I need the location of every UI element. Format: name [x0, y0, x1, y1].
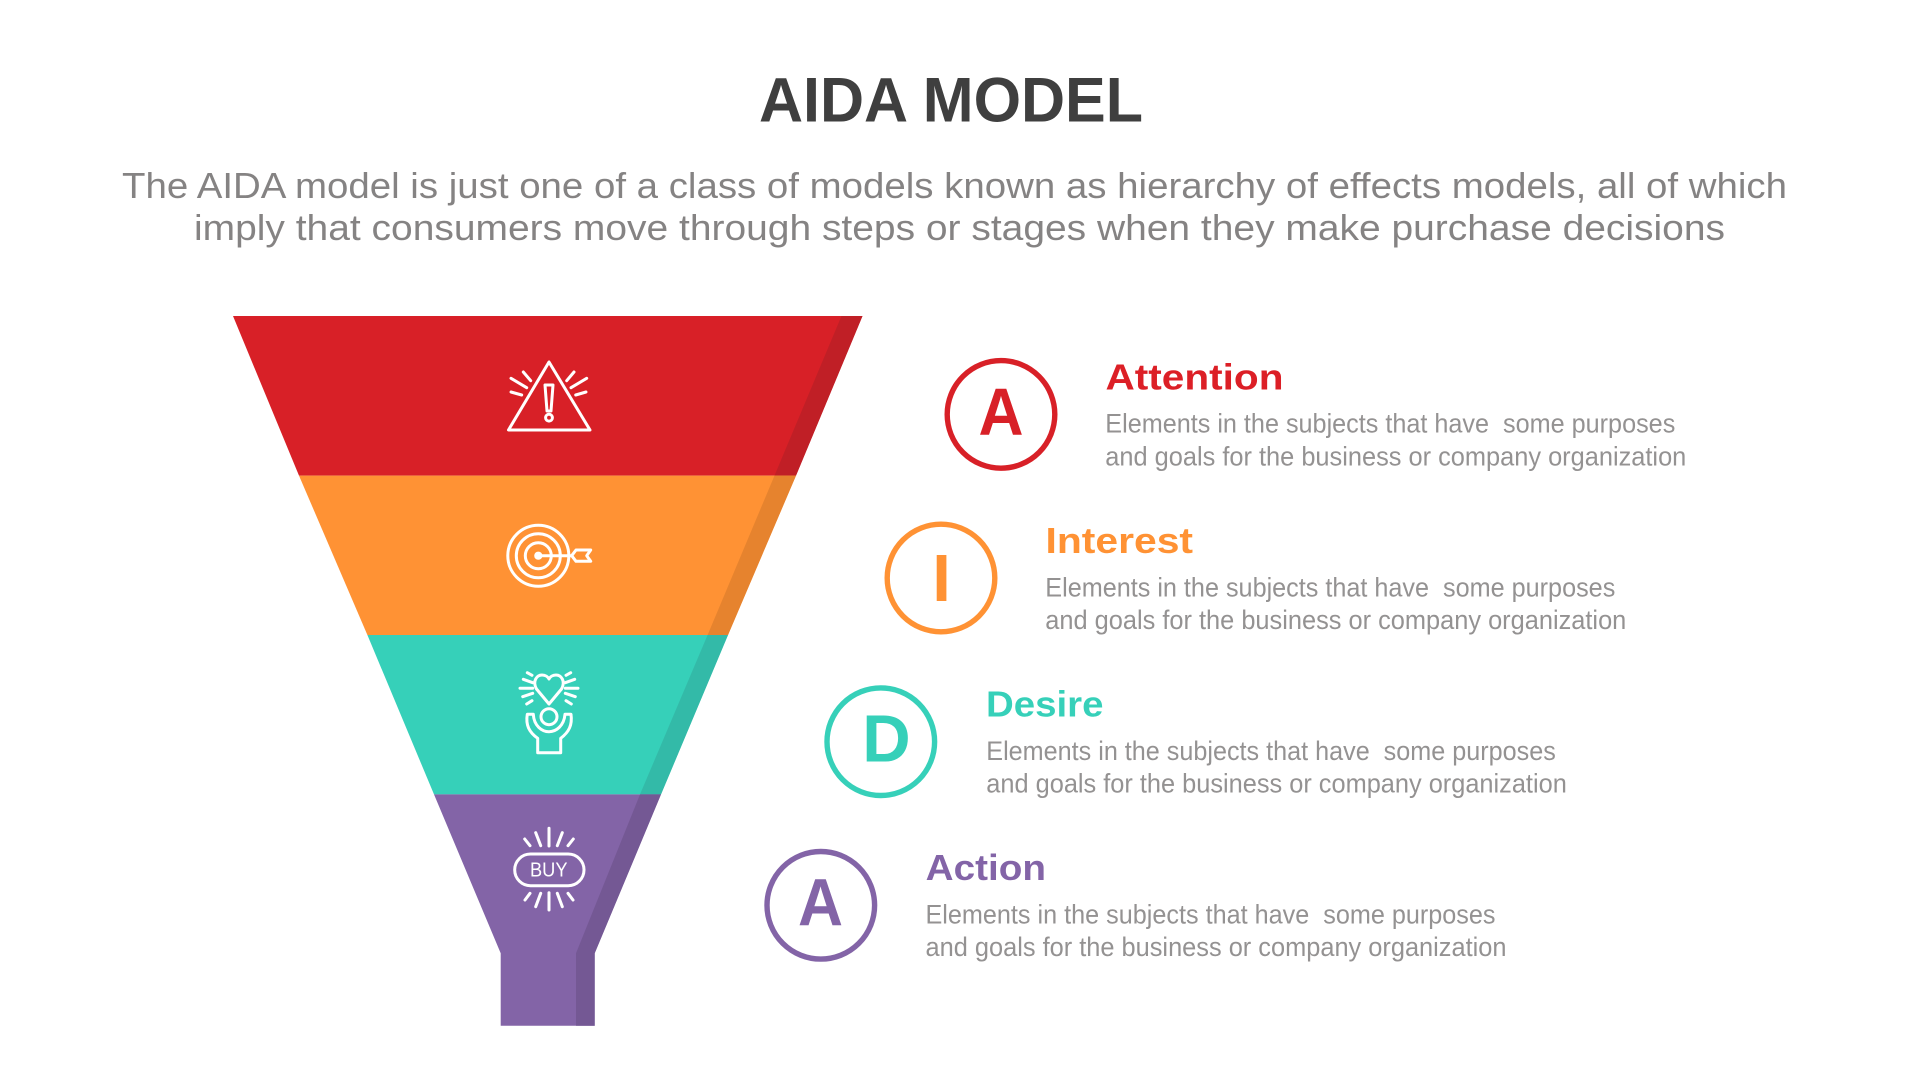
subtitle: The AIDA model is just one of a class of models known as hierarchy of effects models, all of which	[122, 165, 1787, 206]
subtitle: imply that consumers move through steps or stages when they make purchase decisions	[194, 207, 1725, 248]
description: action	[926, 900, 1506, 962]
description: attention	[1105, 409, 1686, 471]
item: attention	[947, 356, 1686, 471]
heading: desire: Desire	[986, 684, 1104, 725]
badge: letter D: D	[862, 702, 911, 777]
description: attention: and goals for the business or company organization	[1105, 441, 1686, 471]
description: action: Elements in the subjects that have some purposes	[926, 900, 1496, 930]
funnel band: interest	[299, 476, 796, 635]
description: action: and goals for the business or company organization	[926, 932, 1506, 962]
icon: buy button	[515, 828, 584, 910]
funnel band: action	[434, 794, 661, 1026]
icon: buy button: BUY	[530, 859, 568, 882]
funnel chart	[233, 316, 862, 1026]
item: action	[767, 847, 1506, 962]
badge: letter A	[947, 361, 1055, 468]
badge: letter A	[767, 852, 875, 959]
funnel band: desire	[367, 635, 728, 794]
heading: interest: Interest	[1046, 520, 1193, 561]
badge: letter D	[827, 688, 935, 796]
description: attention: Elements in the subjects that have some purposes	[1105, 409, 1675, 439]
title: AIDA MODEL	[759, 66, 1143, 136]
description: desire	[986, 736, 1567, 799]
badge: letter A: A	[978, 375, 1024, 450]
badge: letter I	[887, 524, 995, 632]
description: interest	[1045, 572, 1626, 635]
funnel band: attention	[233, 316, 862, 476]
heading: attention: Attention	[1106, 356, 1284, 397]
item: desire	[827, 684, 1567, 799]
icon: person with heart	[520, 673, 578, 753]
description: interest: and goals for the business or company organization	[1045, 605, 1626, 635]
description: interest: Elements in the subjects that have some purposes	[1045, 572, 1615, 602]
subtitle	[122, 165, 1787, 248]
icon: target with arrow	[508, 525, 591, 586]
icon: warning triangle	[508, 362, 590, 430]
badge: letter I: I	[932, 541, 951, 616]
item: interest	[887, 520, 1626, 635]
badge: letter A: A	[798, 866, 843, 941]
heading: action: Action	[926, 847, 1046, 888]
description: desire: and goals for the business or company organization	[986, 769, 1567, 799]
description: desire: Elements in the subjects that have some purposes	[986, 736, 1556, 766]
